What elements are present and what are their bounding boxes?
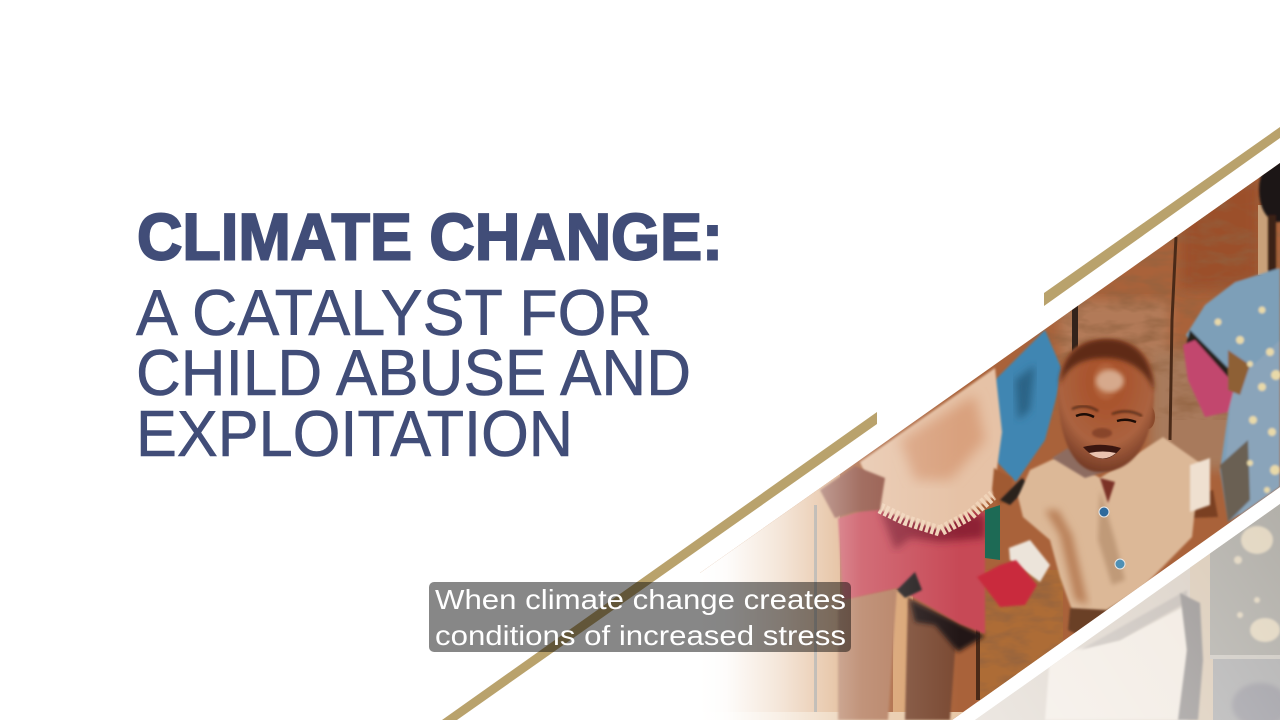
caption: [429, 582, 851, 652]
wooden wall: [700, 160, 1280, 720]
title: [136, 200, 723, 470]
gold stripe: lower left: [442, 412, 877, 720]
subtitle line 2: CHILD ABUSE AND: [136, 336, 691, 409]
infographic slide: [136, 127, 1280, 720]
caption line 2: conditions of increased stress: [435, 620, 846, 651]
subtitle line 3: EXPLOITATION: [136, 397, 573, 470]
caption line 1: When climate change creates: [435, 584, 846, 615]
fade to white on the left of the photo: [700, 406, 942, 720]
title line: climate change: CLIMATE CHANGE:: [137, 200, 723, 274]
child left: poncho, shorts and legs: [820, 330, 1063, 720]
lower photo band: faded clothing: [975, 500, 1280, 720]
gold stripe: upper right: [1044, 127, 1280, 306]
photo: children against wooden wall: [700, 158, 1280, 720]
baby: smiling child in knitted cardigan: [977, 339, 1210, 640]
caption background: [429, 582, 851, 652]
subtitle line 1: A CATALYST FOR: [136, 276, 652, 349]
child right: blue floral top: [1183, 158, 1280, 522]
